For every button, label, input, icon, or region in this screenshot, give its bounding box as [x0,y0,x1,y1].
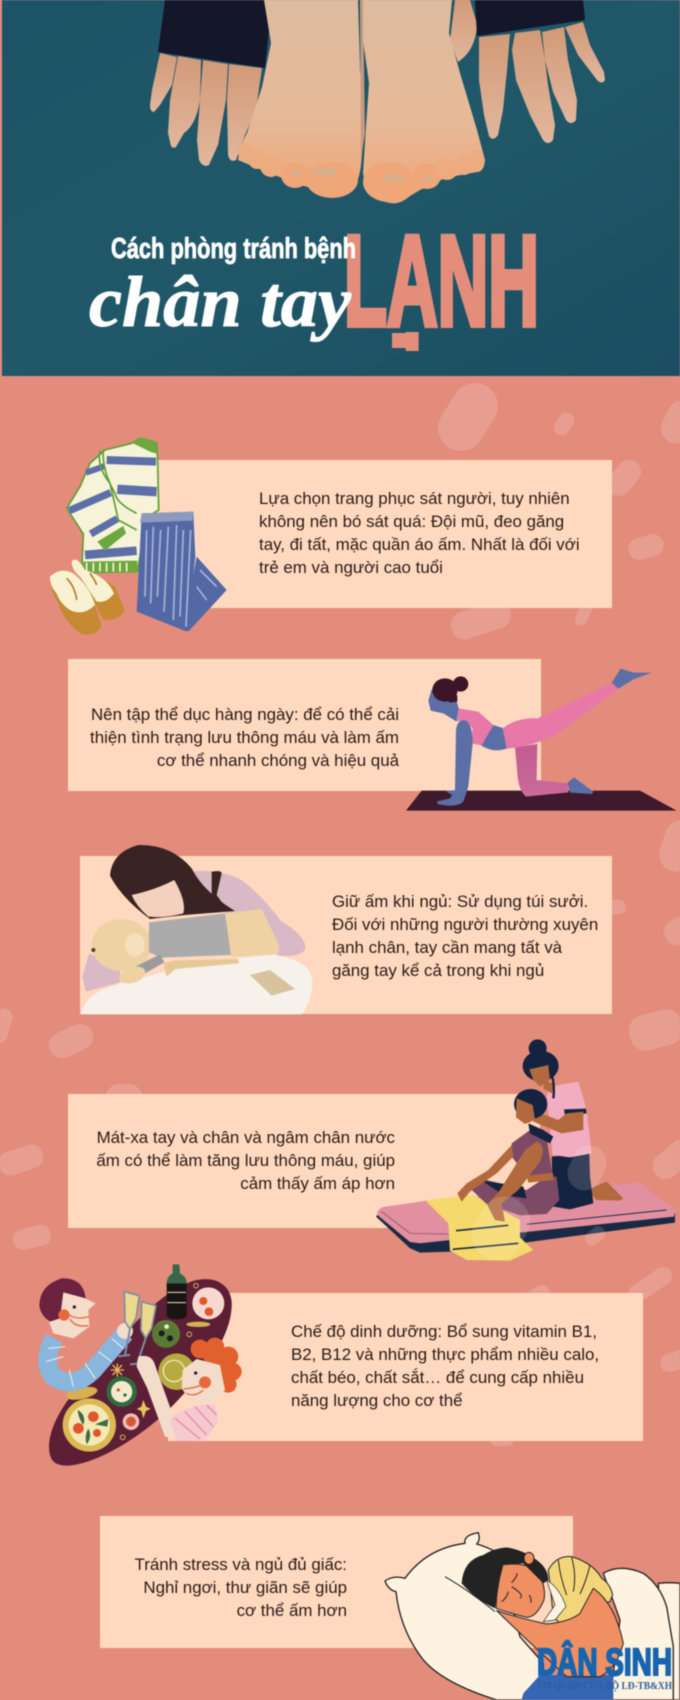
illustration: shared meal [39,1264,242,1466]
toy [548,1556,613,1623]
card 4: massage [68,1094,540,1228]
card 2: exercise: thiện tình trạng lưu thông máu và làm ấm [90,728,399,747]
overlay pills on massage figure [463,1140,612,1270]
sweater [67,437,159,573]
card 4: massage: Mát-xa tay và chân và ngâm chân nước [97,1128,395,1147]
card 6: rest: cơ thể ấm hơn [237,1601,347,1620]
face [132,880,184,917]
hair [432,676,468,703]
card 5: nutrition [168,1293,643,1441]
slippers [50,560,125,635]
card 6: rest: Nghỉ ngơi, thư giãn sẽ giúp [143,1578,347,1597]
sweater [82,871,306,992]
blanket [425,1195,533,1261]
woman with glass [137,1338,242,1441]
back foot [568,777,593,794]
therapist [523,1039,623,1209]
man with glass [39,1278,133,1387]
pizza [63,1398,116,1452]
blanket [603,1568,680,1700]
hero banner [2,0,680,376]
card 3: keep warm while sleeping [80,856,612,1014]
card 1: clothing: trẻ em và người cao tuổi [259,558,443,577]
torso top [457,708,493,745]
card 5: nutrition: B2, B12 và những thực phẩm nhiều calo, [291,1345,599,1364]
mattress [376,1183,675,1253]
champagne glasses [118,1292,156,1364]
card 1: clothing: không nên bó sát quá: Đội mũ, đeo găng [259,512,564,531]
yoga mat [406,791,677,811]
card 3: keep warm while sleeping: găng tay kể cả trong khi ngủ [332,961,544,980]
card 1: clothing: Lựa chọn trang phục sát người, tuy nhiên [259,489,570,508]
title line: Cách phòng tránh bệnh: Cách phòng tránh bệnh [111,233,356,265]
card 3: keep warm while sleeping: Đối với những người thường xuyên [332,915,598,934]
illustration: warm clothes [50,437,227,635]
right hand [450,0,605,143]
head, neck and arm [428,689,459,722]
card 5: nutrition: Chế độ dinh dưỡng: Bổ sung vitamin B1, [291,1322,597,1341]
pillow [385,1533,543,1700]
card 4: massage: ấm có thể làm tăng lưu thông máu, giúp [96,1151,395,1170]
collar [543,1580,566,1622]
table blob [49,1279,232,1466]
card 6: rest [100,1516,573,1648]
far leg [515,744,568,797]
client [457,1089,559,1222]
card 3: keep warm while sleeping: Giữ ấm khi ngủ: Sử dụng túi sưởi. [332,892,588,911]
card 3: keep warm while sleeping: lạnh chân, tay cần mang tất và [332,938,563,957]
phone [250,970,295,996]
raised foot [612,669,652,689]
title line: chân tay: chân tay [89,262,352,342]
decorative pill shapes [0,374,680,1446]
card 1: clothing [156,460,612,608]
hair [110,845,235,919]
hero teal background [2,0,680,376]
card 2: exercise: Nên tập thể dục hàng ngày: để có thể cải [91,705,399,724]
card 5: nutrition: năng lượng cho cơ thể [291,1391,463,1410]
photo: woman sleeping on plush bear [81,845,312,1014]
face [496,1564,544,1617]
raised leg [503,683,618,749]
jeans [137,512,227,632]
arm [497,1588,623,1677]
card 6: rest: Tránh stress và ngủ đủ giấc: [134,1555,347,1574]
shirt [522,1675,613,1700]
illustration: sleeping person [385,1533,680,1700]
left sleeve [158,0,272,68]
card 4: massage: cảm thấy ấm áp hơn [240,1174,395,1193]
card 2: exercise [68,659,541,791]
left foot [238,0,365,198]
hair [462,1547,548,1608]
card 1: clothing: tay, đi tất, mặc quần áo ấm. Nhất là đối với [259,535,580,554]
shorts [481,725,507,750]
illustration: yoga woman [406,669,677,811]
plush bear [91,909,279,987]
side plates and food [65,1283,224,1440]
left hand [150,53,262,166]
title word: LẠNH [344,210,539,353]
card 2: exercise: cơ thể nhanh chóng và hiệu quả [157,751,400,770]
right sleeve [475,0,585,36]
right foot [363,0,485,203]
illustration: massage [376,1039,675,1261]
facial features [502,1573,531,1603]
table [81,955,312,1014]
bottle [167,1264,187,1319]
card 5: nutrition: chất béo, chất sắt… để cung cấp nhiều [291,1368,584,1387]
